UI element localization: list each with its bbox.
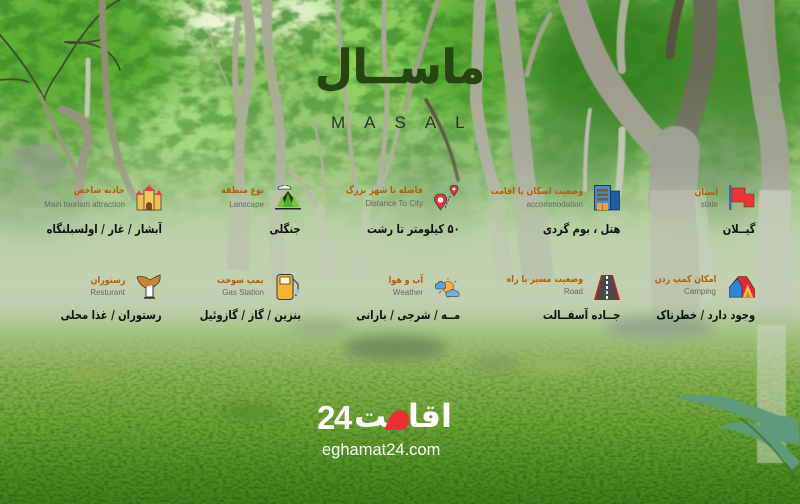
sublabel: accommodation <box>527 200 583 209</box>
value: وجود دارد / خطرناک <box>656 308 755 322</box>
icon: castle <box>136 185 162 210</box>
icon: map pins <box>434 185 458 210</box>
value: هتل ، بوم گردی <box>542 222 620 236</box>
sublabel: Camping <box>684 287 716 296</box>
info card: weather <box>356 274 460 322</box>
grass ground <box>0 300 800 504</box>
sublabel: Gas Station <box>222 288 264 297</box>
label: پمپ سوخت <box>217 275 264 286</box>
info card: gas station <box>200 274 301 322</box>
sublabel: Main tourism attraction <box>44 200 125 209</box>
label: رستوران <box>90 275 125 286</box>
label: استان <box>694 187 718 198</box>
logo pin <box>385 410 409 430</box>
icon: tent <box>729 276 755 298</box>
value: مــه / شرجی / بارانی <box>356 308 460 322</box>
distant house <box>12 142 70 185</box>
icon: buildings <box>594 185 620 210</box>
foliage texture <box>0 0 800 240</box>
value: رستوران / غذا محلی <box>61 308 162 322</box>
icon: flag <box>729 185 754 210</box>
info card: restaurant <box>61 274 162 322</box>
info card: state <box>694 185 756 236</box>
label: امکان کمپ زدن <box>654 274 716 285</box>
icon: forest <box>275 185 301 210</box>
title: Persian name: ماســال <box>315 40 485 95</box>
icon: road <box>594 275 620 300</box>
logo number: 24 <box>317 399 353 436</box>
logo word: اقامت <box>354 398 452 435</box>
website address: eghamat24.com <box>322 441 440 459</box>
info card: distance to city <box>346 184 460 236</box>
tree trunks <box>0 0 776 210</box>
value: جنگلی <box>270 222 301 236</box>
sublabel: Road <box>564 287 583 296</box>
label: آب و هوا <box>388 275 423 286</box>
value: ۵۰ کیلومتر تا رشت <box>367 222 460 236</box>
sublabel: Lanscape <box>229 200 264 209</box>
info card: main tourism attraction <box>44 185 162 236</box>
lower trunks in the mist <box>238 190 775 340</box>
sublabel: state <box>701 200 718 209</box>
value: گیــلان <box>722 222 755 236</box>
sublabel: Distance To City <box>365 199 423 208</box>
value: آبشار / غار / اولسبلنگاه <box>47 222 162 236</box>
info card: road <box>506 274 620 322</box>
label: وضعیت مسیر یا راه <box>506 274 583 285</box>
mossy mounds <box>65 317 715 417</box>
info card: accommodation <box>490 185 620 236</box>
info card: landscape <box>221 185 301 236</box>
icon: sun and clouds <box>435 278 460 298</box>
right trunk base over grass <box>757 325 786 463</box>
value: بنزین / گاز / گازوئیل <box>200 308 301 322</box>
fern <box>676 395 800 480</box>
logo: eghamat24 <box>317 398 452 459</box>
value: جــاده آسفــالت <box>543 308 620 322</box>
info card: camping <box>654 274 755 322</box>
mist layer <box>0 70 800 380</box>
sublabel: Weather <box>393 288 423 297</box>
sublabel: Resturant <box>90 288 125 297</box>
label: جاذبه شاخص <box>74 185 125 196</box>
label: نوع منطقه <box>221 185 264 196</box>
icon: fuel pump <box>276 274 299 300</box>
subtitle: Latin name: MASAL <box>331 113 484 132</box>
label: وضعیت اسکان یا اقامت <box>490 186 583 197</box>
icon: fish on plate <box>136 274 160 299</box>
label: فاصله تا شهر بزرگ <box>346 185 423 196</box>
